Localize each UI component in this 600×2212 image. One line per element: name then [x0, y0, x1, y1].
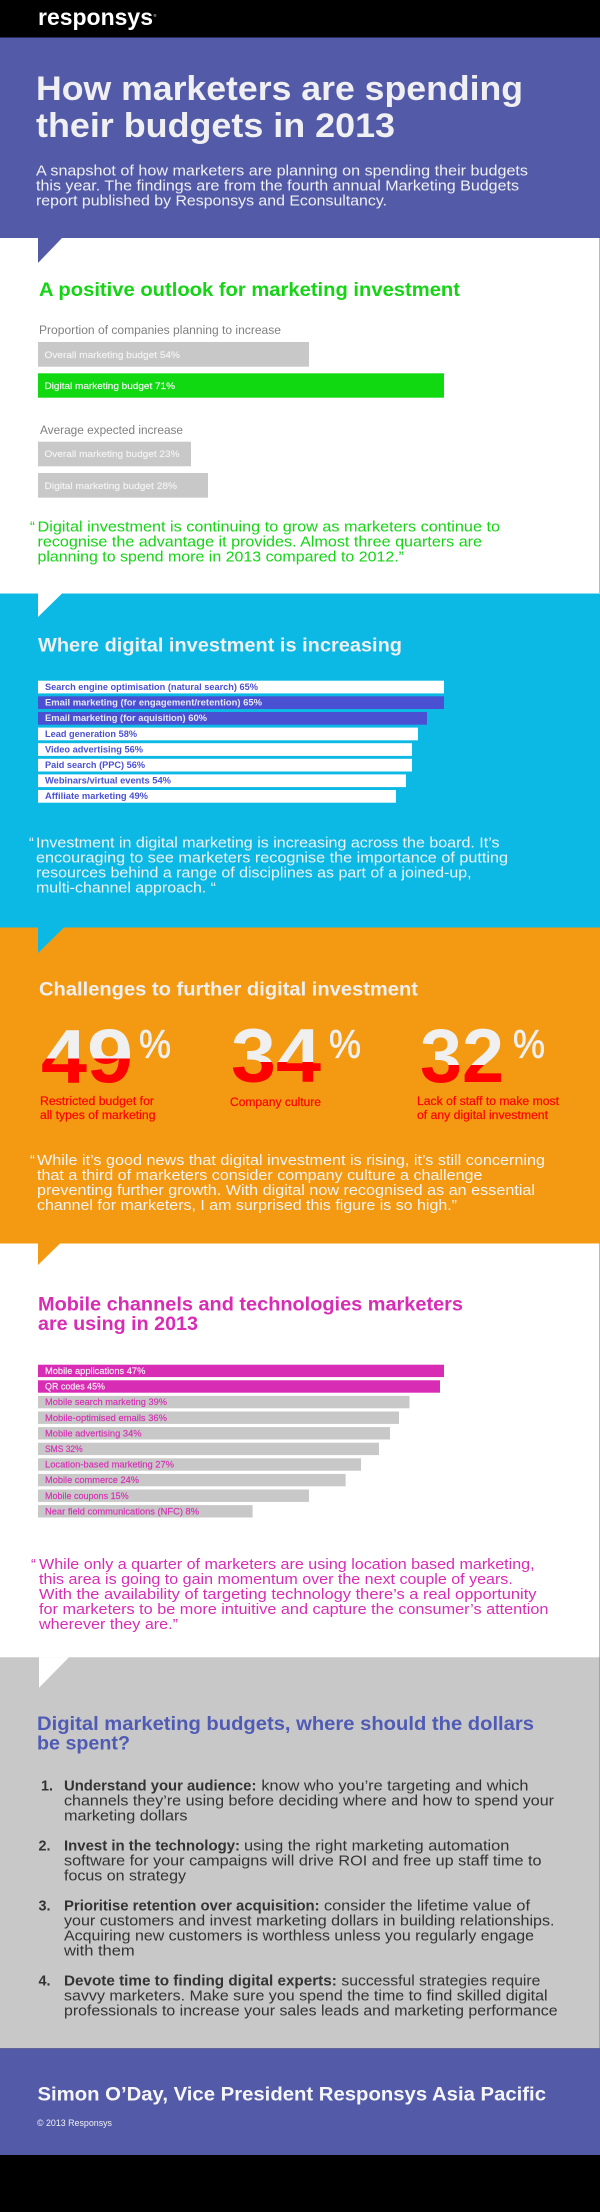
intro text: report published by Responsys and Econsultancy. [36, 194, 387, 210]
speech tail [38, 238, 62, 263]
list item 4: professionals to increase your sales leads and marketing performance [64, 2004, 558, 2020]
speech tail [38, 928, 64, 953]
list item 2: software for your campaigns will drive ROI and free up staff time to [64, 1854, 542, 1870]
quote: Investment in digital marketing is increasing across the board. It’s [36, 835, 500, 851]
list item 4: successful strategies require [341, 1974, 540, 1990]
list item 3 [38, 1899, 554, 1960]
heading: are using in 2013 [38, 1313, 198, 1335]
stat: 49%: Restricted budget for [40, 1094, 154, 1108]
stat: 32%: 32 [420, 1014, 504, 1099]
list item 2: using the right marketing automation [244, 1839, 509, 1855]
list item 2: Invest in the technology: [64, 1839, 240, 1855]
quote: wherever they are.” [38, 1617, 178, 1633]
heading [37, 1713, 534, 1754]
intro text: this year. The findings are from the fourth annual Marketing Budgets [36, 179, 519, 195]
list item 2: focus on strategy [64, 1869, 187, 1885]
panel: mobile channels [0, 1244, 600, 1658]
bar: overall 54% [38, 342, 309, 367]
list item 3: your customers and invest marketing dollars in building relationships. [64, 1914, 554, 1930]
bar chart: Affiliate marketing 49% [45, 791, 148, 802]
brand bar [0, 0, 600, 38]
panel: footer [0, 2048, 600, 2155]
bar: digital 71%: Digital marketing budget 71% [44, 381, 175, 392]
bar chart: Video advertising 56% [45, 744, 143, 755]
intro text: A snapshot of how marketers are planning on spending their budgets [36, 164, 528, 180]
stat: 49%: all types of marketing [40, 1108, 156, 1122]
list item 2: 2. [38, 1839, 51, 1855]
bar chart: Location-based marketing 27% [45, 1460, 174, 1471]
list item 3: with them [63, 1944, 135, 1960]
quote: channel for marketers, I am surprised this figure is so high.” [37, 1198, 457, 1214]
quote: planning to spend more in 2013 compared to 2012.” [38, 550, 404, 566]
bar chart: Mobile-optimised emails 36% [45, 1413, 167, 1424]
list item 3: Prioritise retention over acquisition: [64, 1899, 320, 1915]
title: How marketers are spending [36, 70, 523, 108]
quote: While only a quarter of marketers are using location based marketing, [39, 1557, 535, 1573]
stat: 49%: % [139, 1023, 171, 1067]
panel: challenges [0, 928, 600, 1244]
bar chart: Lead generation 58% [45, 729, 137, 740]
bar chart: Mobile applications 47% [45, 1366, 146, 1377]
list item 1: channels they’re using before deciding where and how to spend your [64, 1794, 554, 1810]
heading: Challenges to further digital investment [39, 979, 419, 1001]
title [36, 70, 523, 145]
quote [31, 1557, 548, 1633]
logo: responsys: ® [154, 13, 156, 18]
panel: title header [0, 38, 600, 238]
list item 4: savvy marketers. Make sure you spend the time to find skilled digital [64, 1989, 548, 2005]
list item 1: 1. [41, 1779, 53, 1795]
bar: digital 71% [38, 373, 444, 398]
stat: 32% [417, 1014, 560, 1122]
bar chart: Mobile coupons 15% [45, 1491, 129, 1502]
stat: 34%: 34 [231, 1014, 321, 1099]
bar chart [38, 1365, 444, 1518]
stat: 34%: % [329, 1023, 361, 1067]
bar chart [38, 681, 444, 803]
subheading: proportion: Proportion of companies planning to increase [39, 323, 281, 337]
bar: overall 54%: Overall marketing budget 54% [44, 350, 180, 361]
bar chart: Webinars/virtual events 54% [45, 776, 171, 787]
quote: “ [30, 520, 35, 536]
bar chart: Mobile commerce 24% [45, 1475, 139, 1486]
bar chart: Near field communications (NFC) 8% [45, 1506, 199, 1517]
quote: multi-channel approach. “ [36, 880, 216, 896]
list item 1 [41, 1779, 554, 1825]
heading: A positive outlook for marketing investment [39, 279, 461, 301]
bar chart: Email marketing (for engagement/retention) 65% [45, 698, 262, 709]
quote [29, 835, 508, 896]
stat: 34% [230, 1014, 361, 1109]
heading: Digital marketing budgets, where should the dollars [37, 1713, 534, 1735]
panel: where should the dollars be spent [0, 1657, 600, 2048]
heading: Where digital investment is increasing [38, 635, 402, 657]
intro text [36, 164, 528, 210]
quote: With the availability of targeting technology there’s a real opportunity [39, 1587, 537, 1603]
speech tail [39, 1657, 69, 1688]
quote: encouraging to see marketers recognise the importance of putting [36, 850, 508, 866]
heading [38, 1294, 463, 1335]
bar: overall 23% [38, 442, 191, 466]
list item 3: Acquiring new customers is worthless unless you regularly engage [64, 1929, 534, 1945]
list item 4: Devote time to finding digital experts: [64, 1974, 337, 1990]
list item 4 [38, 1974, 558, 2020]
list item 3: consider the lifetime value of [324, 1899, 531, 1915]
author: Simon O’Day, Vice President Responsys Asia Pacific [38, 2084, 546, 2106]
bar chart: SMS 32% [45, 1444, 83, 1455]
heading: be spent? [37, 1732, 130, 1754]
stat: 32%: % [513, 1023, 545, 1067]
panel: positive outlook [0, 238, 600, 594]
quote: recognise the advantage it provides. Almost three quarters are [38, 535, 482, 551]
quote [30, 520, 500, 566]
quote: that a third of marketers consider company culture a challenge [37, 1168, 482, 1184]
bar: overall 23%: Overall marketing budget 23% [44, 449, 180, 460]
stat: 49% [40, 1014, 171, 1122]
quote: Digital investment is continuing to grow as marketers continue to [38, 520, 500, 536]
list item 4: 4. [38, 1974, 51, 1990]
stat: 49%: 49 [41, 1014, 133, 1100]
logo: responsys: responsys [38, 4, 153, 30]
list item 3: 3. [38, 1899, 51, 1915]
stat: 34%: Company culture [230, 1095, 321, 1109]
quote [30, 1153, 545, 1214]
quote: for marketers to be more intuitive and capture the consumer’s attention [39, 1602, 548, 1618]
title: their budgets in 2013 [36, 107, 395, 145]
bar chart: Email marketing (for aquisition) 60% [45, 713, 207, 724]
list item 1: know who you’re targeting and which [261, 1779, 528, 1795]
speech tail [38, 1244, 60, 1265]
quote: resources behind a range of disciplines as part of a joined-up, [36, 865, 472, 881]
bar chart: Paid search (PPC) 56% [45, 760, 145, 771]
quote: “ [29, 835, 34, 851]
quote: While it’s good news that digital investment is rising, it’s still concerning [37, 1153, 545, 1169]
copyright: © 2013 Responsys [37, 2118, 112, 2128]
bar chart: Mobile advertising 34% [45, 1428, 142, 1439]
speech tail [38, 594, 62, 617]
stat: 32%: Lack of staff to make most [417, 1094, 560, 1108]
bar: digital 28% [38, 473, 208, 498]
bar chart: QR codes 45% [45, 1382, 105, 1393]
list item 1: Understand your audience: [64, 1779, 256, 1795]
quote: this area is going to gain momentum over the next couple of years. [39, 1572, 513, 1588]
quote: “ [30, 1153, 35, 1169]
bar chart: Mobile search marketing 39% [45, 1397, 167, 1408]
quote: “ [31, 1557, 36, 1573]
stat: 32%: of any digital investment [417, 1108, 549, 1122]
bar chart: Search engine optimisation (natural search) 65% [45, 682, 258, 693]
heading: Mobile channels and technologies marketers [38, 1294, 463, 1316]
quote: preventing further growth. With digital now recognised as an essential [37, 1183, 535, 1199]
bar: digital 28%: Digital marketing budget 28% [44, 481, 177, 492]
list item 2 [38, 1839, 542, 1885]
subheading: average: Average expected increase [40, 423, 183, 437]
list item 1: marketing dollars [64, 1809, 188, 1825]
panel: where digital investment is increasing [0, 594, 600, 928]
